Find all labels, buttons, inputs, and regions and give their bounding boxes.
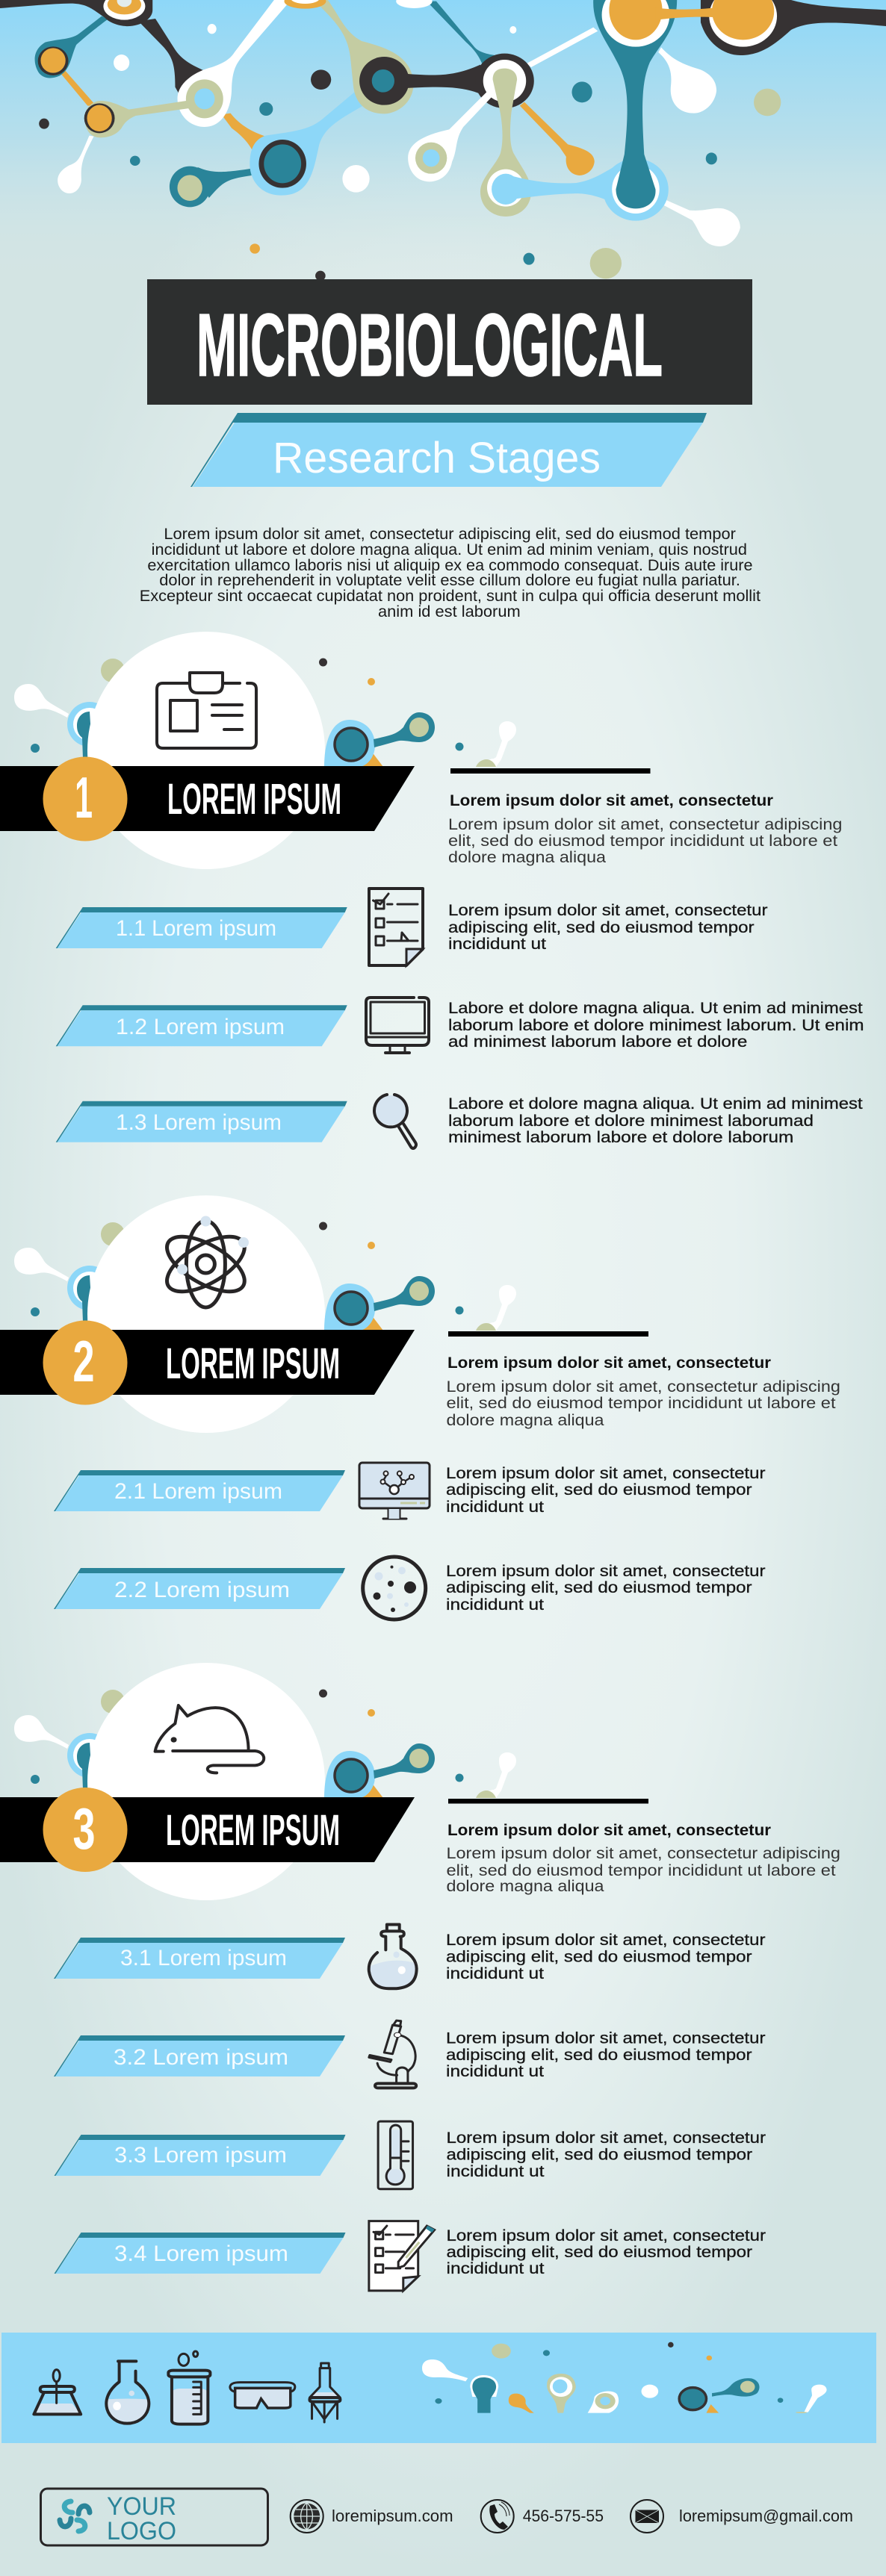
step 3.3 text: adipiscing elit, sed do eiusmod tempor (447, 2146, 752, 2164)
intro paragraph: exercitation ullamco laboris nisi ut aliquip ex ea commodo consequat. Duis aute irure (147, 557, 752, 574)
step 1.3 text: Labore et dolore magna aliqua. Ut enim ad minimest (448, 1095, 863, 1113)
icon: lab mouse (155, 1705, 264, 1773)
step 1.1 text: incididunt ut (448, 936, 546, 953)
step 1.3 text: minimest laborum labore et dolore laborum (448, 1129, 793, 1146)
step 1.2 text: laborum labore et dolore minimest laborum. Ut enim (448, 1017, 864, 1034)
number badge 1: 1 (75, 765, 93, 830)
section 3 summary (447, 1799, 840, 1895)
section 1 summary: Lorem ipsum dolor sit amet, consectetur adipiscing (448, 816, 842, 833)
step 2.2 text: incididunt ut (446, 1596, 544, 1614)
icon: round flask (369, 1924, 417, 1988)
subtitle ribbon: Research Stages (273, 434, 601, 482)
icon: round flask (106, 2361, 149, 2424)
logo text: YOUR (107, 2492, 176, 2521)
contact: email (631, 2500, 853, 2533)
step 2.1 text (446, 1465, 765, 1516)
section 2 summary (447, 1331, 840, 1429)
icon: logo swirl (60, 2501, 90, 2531)
step 1.1 text (448, 902, 768, 953)
step 3.4 label (54, 2233, 345, 2274)
section 3 summary: Lorem ipsum dolor sit amet, consectetur (447, 1822, 771, 1839)
icon: computer with molecule (359, 1463, 430, 1519)
step 2.2 text: Lorem ipsum dolor sit amet, consectetur (446, 1563, 765, 1580)
intro paragraph: anim id est laborum (378, 603, 521, 620)
icon: id badge (157, 673, 256, 748)
step 3.2 label: 3.2 Lorem ipsum (114, 2045, 288, 2070)
subtitle ribbon (190, 413, 707, 487)
icon: atom (158, 1216, 253, 1307)
section 2 summary: Lorem ipsum dolor sit amet, consectetur adipiscing (447, 1378, 840, 1396)
banner: section 2: LOREM IPSUM (166, 1340, 340, 1388)
contact: website (291, 2500, 453, 2533)
icon: beaker (168, 2351, 210, 2424)
section 3 summary: dolore magna aliqua (447, 1878, 604, 1895)
step 1.1 label (56, 907, 347, 948)
logo box (40, 2489, 267, 2545)
step 3.4 text: adipiscing elit, sed do eiusmod tempor (447, 2244, 752, 2261)
lab equipment icons (34, 2351, 340, 2424)
contact: phone: 456-575-55 (523, 2507, 604, 2525)
banner: section 1: LOREM IPSUM (167, 775, 341, 824)
icon: checklist with pen (369, 2221, 435, 2291)
step 3.1 label (54, 1938, 345, 1979)
logo text: LOGO (107, 2517, 176, 2545)
contact: website: loremipsum.com (332, 2507, 453, 2525)
step 1.2 text: Labore et dolore magna aliqua. Ut enim ad minimest (448, 1000, 863, 1017)
section 2 summary: Lorem ipsum dolor sit amet, consectetur (447, 1354, 771, 1372)
step 2.1 text: Lorem ipsum dolor sit amet, consectetur (446, 1465, 765, 1482)
step 1.3 label (56, 1101, 347, 1142)
step 3.3 text: incididunt ut (447, 2163, 545, 2180)
banner: section 2 (0, 1330, 415, 1395)
step 3.2 text (446, 2029, 765, 2080)
step 3.2 text: incididunt ut (446, 2063, 544, 2080)
section 3 summary: elit, sed do eiusmod tempor incididunt ut labore et (447, 1862, 836, 1879)
step 2.2 text: adipiscing elit, sed do eiusmod tempor (446, 1579, 752, 1596)
step 1.3 text (448, 1095, 863, 1146)
section 1 summary: elit, sed do eiusmod tempor incididunt ut labore et (448, 833, 837, 850)
step 1.2 label: 1.2 Lorem ipsum (116, 1015, 285, 1039)
step 3.2 text: adipiscing elit, sed do eiusmod tempor (446, 2047, 752, 2064)
step 1.3 label: 1.3 Lorem ipsum (116, 1110, 282, 1135)
step 3.2 text: Lorem ipsum dolor sit amet, consectetur (446, 2029, 765, 2047)
icon: microscope (369, 2020, 416, 2088)
step 1.2 label (56, 1005, 347, 1046)
icon: magnifier (374, 1095, 416, 1148)
intro paragraph: Lorem ipsum dolor sit amet, consectetur adipiscing elit, sed do eiusmod tempor (164, 526, 736, 543)
icon: thermometer (378, 2121, 413, 2189)
icon: monitor (366, 998, 429, 1053)
step 1.1 text: adipiscing elit, sed do eiusmod tempor (448, 919, 755, 936)
step 2.2 text (446, 1563, 765, 1614)
step 3.4 text (447, 2227, 766, 2277)
step 1.1 label: 1.1 Lorem ipsum (116, 916, 276, 941)
section 1 summary (448, 768, 842, 866)
bottom band (1, 2333, 876, 2443)
step 3.1 text (446, 1932, 765, 1982)
intro paragraph: Excepteur sint occaecat cupidatat non proident, sunt in culpa qui officia deserunt mollit (140, 588, 760, 605)
small molecule illustration (422, 2342, 827, 2413)
step 3.1 text: incididunt ut (446, 1965, 544, 1982)
number badge 1 (43, 757, 127, 841)
icon: checklist (369, 889, 423, 965)
step 3.1 text: adipiscing elit, sed do eiusmod tempor (446, 1949, 752, 1965)
step 3.1 text: Lorem ipsum dolor sit amet, consectetur (446, 1932, 765, 1949)
number badge 3: 3 (73, 1796, 96, 1861)
step 1.1 text: Lorem ipsum dolor sit amet, consectetur (448, 902, 768, 919)
step 2.1 label (54, 1470, 345, 1511)
icon: goggles (230, 2383, 295, 2408)
step 3.3 label (54, 2135, 345, 2176)
section 1 header (0, 632, 516, 869)
logo text (107, 2492, 176, 2545)
section 3 summary: Lorem ipsum dolor sit amet, consectetur adipiscing (447, 1845, 840, 1862)
section 1 summary: dolore magna aliqua (448, 849, 606, 866)
section 2 summary: dolore magna aliqua (447, 1412, 604, 1429)
step 1.2 text (448, 1000, 864, 1051)
step 3.2 label (54, 2035, 345, 2076)
step 3.3 label: 3.3 Lorem ipsum (114, 2143, 287, 2168)
icon: petri dish (363, 1557, 426, 1620)
icon: filter funnel (310, 2363, 340, 2422)
step 2.1 text: incididunt ut (446, 1499, 544, 1516)
step 3.3 text: Lorem ipsum dolor sit amet, consectetur (447, 2129, 766, 2147)
banner: section 1 (0, 766, 415, 831)
section 1 summary: Lorem ipsum dolor sit amet, consectetur (450, 792, 773, 809)
step 3.4 text: incididunt ut (447, 2260, 545, 2277)
step 3.1 label: 3.1 Lorem ipsum (120, 1946, 287, 1970)
step 3.3 text (447, 2129, 766, 2180)
number badge 2 (43, 1320, 127, 1405)
step 2.2 label (54, 1568, 345, 1609)
banner: section 3: LOREM IPSUM (166, 1806, 340, 1855)
step 1.3 text: laborum labore et dolore minimest laborumad (448, 1113, 814, 1130)
banner: section 3 (0, 1797, 415, 1862)
intro paragraph: incididunt ut labore et dolore magna aliqua. Ut enim ad minim veniam, quis nostrud (152, 541, 747, 559)
step 3.4 label: 3.4 Lorem ipsum (114, 2241, 288, 2266)
section 2 summary: elit, sed do eiusmod tempor incididunt ut labore et (447, 1395, 836, 1412)
step 2.2 label: 2.2 Lorem ipsum (114, 1578, 290, 1602)
icon: burner flask (34, 2370, 81, 2414)
number badge 3 (43, 1788, 127, 1872)
section 3 header (0, 1663, 516, 1900)
intro paragraph (140, 526, 760, 620)
step 3.4 text: Lorem ipsum dolor sit amet, consectetur (447, 2227, 766, 2244)
step 2.1 label: 2.1 Lorem ipsum (114, 1479, 282, 1504)
intro paragraph: dolor in reprehenderit in voluptate velit esse cillum dolore eu fugiat nulla pariatur. (159, 572, 740, 589)
step 2.1 text: adipiscing elit, sed do eiusmod tempor (446, 1481, 752, 1499)
title block (147, 279, 752, 405)
contact: phone (481, 2500, 604, 2533)
step 1.2 text: ad minimest laborum labore et dolore (448, 1033, 747, 1051)
section 2 header (0, 1195, 516, 1433)
contact: email: loremipsum@gmail.com (679, 2507, 853, 2525)
molecule illustration at top (0, 0, 886, 281)
number badge 2: 2 (73, 1328, 94, 1394)
